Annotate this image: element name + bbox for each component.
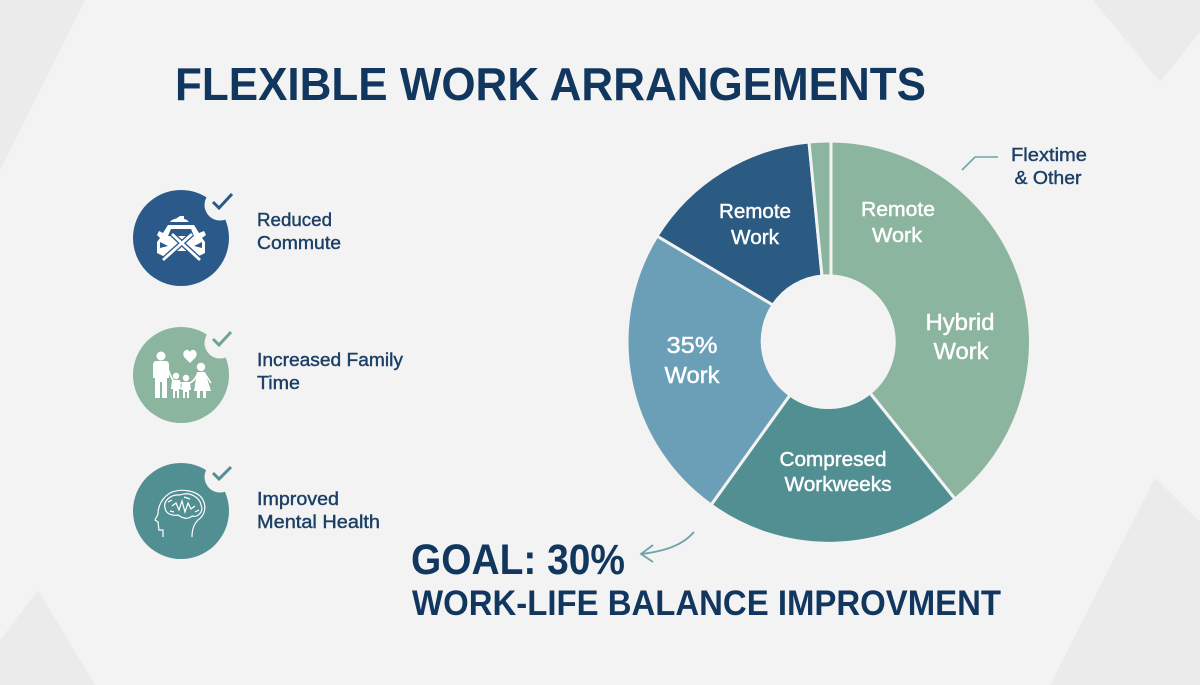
slice: flextime and other [809,141,831,276]
slice labels: Work [872,225,923,247]
slice labels: Work [731,227,780,249]
slice labels [664,199,994,496]
slice labels: Work [664,362,720,388]
slice labels: Compresed [780,449,886,471]
callout: flextime and other [962,144,1087,188]
label: improved mental health: Improved [257,489,339,509]
icon: head with brain [133,462,236,559]
icon: car with cross [133,190,236,286]
callout: flextime and other: Flextime [1011,144,1087,165]
slice labels: Remote [861,199,935,221]
benefit: reduced commute [133,190,341,286]
label: improved mental health: Mental Health [257,512,380,532]
slice labels: Workweeks [784,474,892,496]
label: increased family time: Time [257,373,300,393]
slice labels: Remote [719,201,791,223]
icon: check mark [213,194,232,208]
label: increased family time: Increased Family [257,350,403,370]
title: FLEXIBLE WORK ARRANGEMENTS [175,58,926,110]
slice: hybrid work [831,141,1030,499]
callout: flextime and other: & Other [1014,167,1082,188]
slice: compressed workweeks [711,393,955,543]
slice: remote work [657,142,822,305]
goal text: GOAL: 30% [411,536,625,584]
slice labels: Work [934,338,989,364]
label: reduced commute: Reduced [257,210,332,230]
icon: check mark [213,332,231,345]
benefit: increased family time [133,327,403,423]
slice labels: 35% [666,332,718,358]
slice: 35% work [627,236,790,505]
arrow [641,532,694,562]
icon: family with heart [133,327,236,423]
goal text: WORK-LIFE BALANCE IMPROVMENT [412,584,1001,623]
icon: check mark [213,467,231,479]
goal text [411,536,1001,623]
benefit: improved mental health [133,462,380,559]
slice labels: Hybrid [926,309,994,335]
label: reduced commute: Commute [257,233,341,253]
donut chart [627,141,1030,543]
